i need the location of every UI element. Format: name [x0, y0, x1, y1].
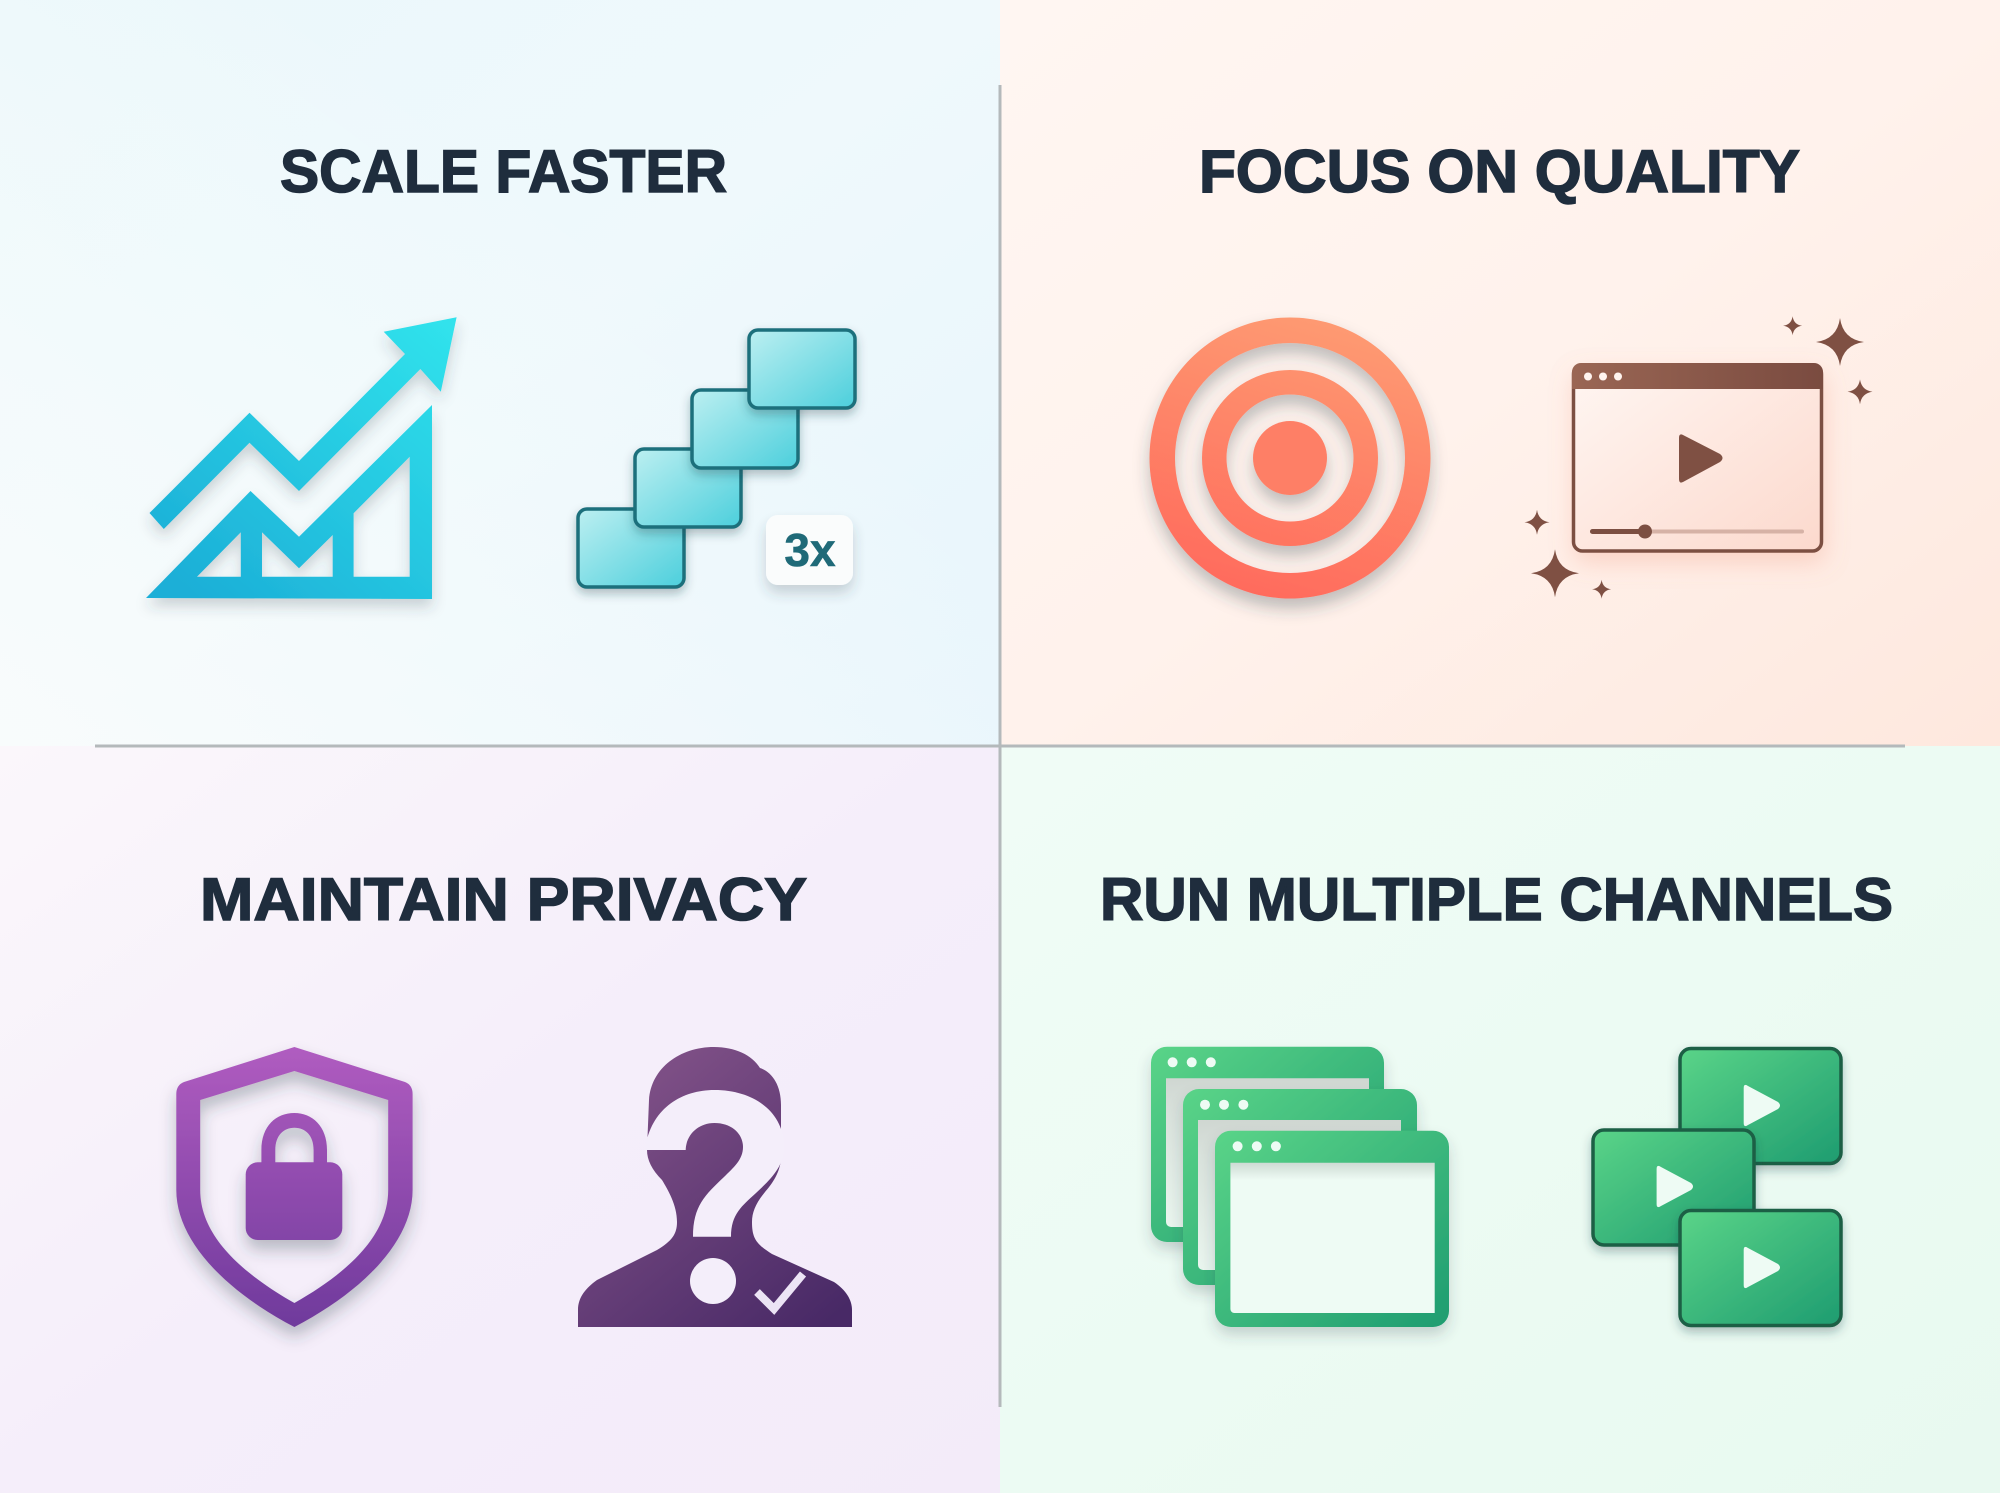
window front	[1215, 1131, 1449, 1327]
tile top	[1680, 1048, 1841, 1164]
icon: staircase of tiles	[578, 330, 855, 587]
heading: maintain privacy: MAINTAIN PRIVACY	[200, 866, 807, 933]
icon: sparkles	[1524, 316, 1872, 599]
icon: video window	[1572, 363, 1823, 551]
icon: anonymous person with question mark	[578, 1047, 852, 1327]
window middle	[1183, 1089, 1417, 1285]
tile left	[1593, 1130, 1754, 1245]
window back	[1151, 1047, 1384, 1242]
padlock	[261, 1113, 327, 1164]
icon: growth chart with arrow	[146, 317, 457, 599]
panel: focus on quality	[1000, 0, 2000, 746]
badge: 3x: 3x	[784, 524, 836, 576]
panel: scale faster	[0, 0, 1000, 746]
heading: focus on quality: FOCUS ON QUALITY	[1199, 138, 1800, 205]
icon: video tiles	[1593, 1048, 1841, 1326]
icon: shield with padlock	[176, 1047, 413, 1327]
icon: target	[1150, 318, 1431, 598]
progress bar	[1590, 524, 1804, 538]
panel: maintain privacy	[0, 746, 1000, 1493]
heading: run multiple channels: RUN MULTIPLE CHANNELS	[1100, 866, 1893, 933]
heading: scale faster: SCALE FASTER	[280, 138, 727, 205]
play button	[1679, 434, 1722, 483]
icon: stacked browser windows	[1151, 1047, 1449, 1327]
badge: 3x	[766, 515, 853, 585]
panel: run multiple channels	[1000, 746, 2000, 1493]
tile bottom	[1680, 1210, 1841, 1326]
